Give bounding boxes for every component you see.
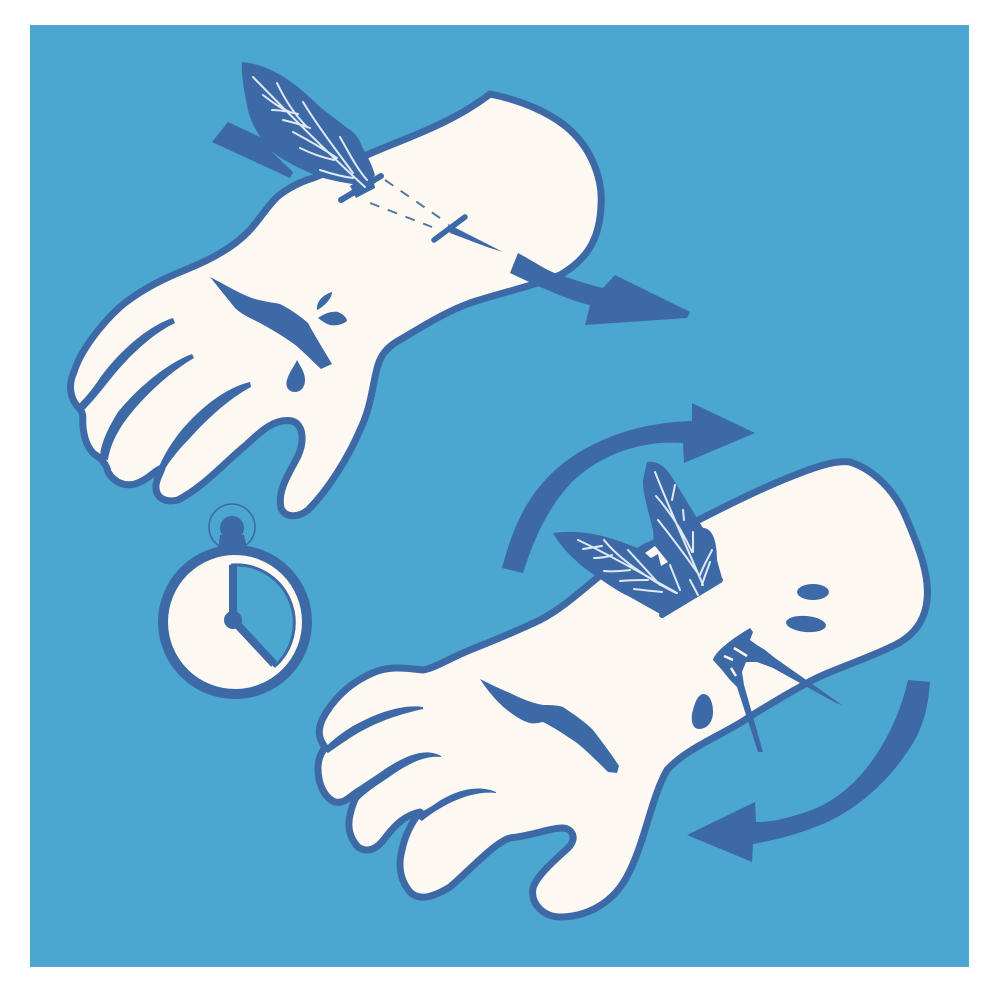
arrow: curved rotation arrow bottom bbox=[687, 680, 930, 862]
drop: lower oval bbox=[785, 614, 827, 634]
arrow path: dashed lines through wrist bbox=[370, 180, 440, 227]
drop: small blood drop bbox=[318, 312, 347, 325]
wound: broken shaft with splinters bbox=[713, 628, 842, 752]
feather veins bbox=[578, 472, 712, 595]
arrow: feathers on lower arm bbox=[553, 462, 722, 615]
drop: large blood drop bbox=[286, 360, 305, 392]
drop: upper oval bbox=[797, 584, 829, 600]
arrow: tip inside the wrist bbox=[434, 217, 503, 252]
feather veins bbox=[253, 77, 367, 187]
feather base slit bbox=[341, 176, 381, 200]
hand: upper arm and hand bbox=[71, 94, 601, 516]
finger line 1 bbox=[78, 318, 175, 410]
arrow: feather fletching on upper arrow bbox=[242, 62, 381, 200]
wound: palm side exit bbox=[210, 277, 332, 369]
finger line 2 bbox=[100, 354, 194, 460]
icon: stopwatch bbox=[163, 504, 307, 694]
finger line 2 bbox=[348, 752, 441, 804]
white notch between feathers bbox=[645, 546, 668, 566]
feather one bbox=[640, 462, 722, 612]
base slit bbox=[662, 580, 720, 615]
drop: blood drop lower bbox=[692, 694, 713, 729]
arrow: curved rotation arrow top bbox=[502, 403, 755, 573]
feather two bbox=[553, 532, 700, 615]
finger line 3 bbox=[414, 789, 496, 821]
arrow: rear shaft of upper arrow bbox=[212, 122, 293, 178]
wound: palm side bbox=[480, 679, 619, 773]
arrow: exit shaft and head bbox=[510, 253, 690, 325]
drop: tiny blood drop bbox=[317, 292, 332, 310]
hand: lower arm and hand bbox=[318, 462, 927, 917]
finger line 1 bbox=[323, 706, 423, 753]
finger line 3 bbox=[157, 382, 251, 472]
